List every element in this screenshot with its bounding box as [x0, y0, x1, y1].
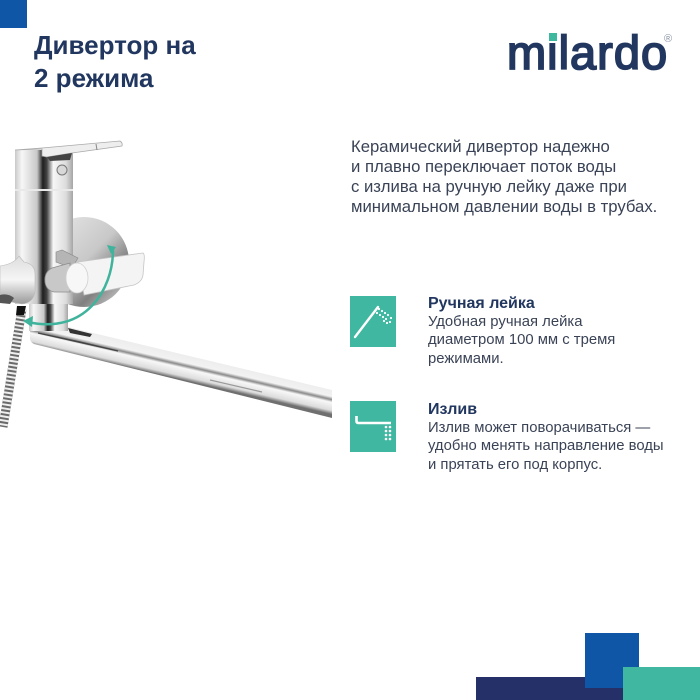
lever — [15, 141, 122, 175]
main body — [15, 150, 73, 304]
faucet illustration — [0, 140, 332, 428]
title — [34, 30, 196, 93]
text block: hand shower — [428, 295, 615, 367]
intro text: и плавно переключает поток воды — [351, 157, 616, 176]
description: hand shower: диаметром 100 мм с тремя — [428, 332, 615, 348]
corner square: top left — [0, 0, 27, 28]
description: spout: удобно менять направление воды — [428, 438, 664, 454]
side arm — [0, 256, 35, 304]
description: spout — [428, 420, 664, 473]
heading: hand shower: Ручная лейка — [428, 295, 535, 312]
diverter knob — [45, 250, 88, 293]
description: hand shower: Удобная ручная лейка — [428, 314, 582, 330]
text block: spout — [428, 401, 664, 473]
description: hand shower: режимами. — [428, 351, 504, 367]
icon: spout — [350, 401, 396, 452]
title: Дивертор на — [34, 30, 196, 60]
spout — [30, 327, 332, 418]
intro text: минимальном давлении воды в трубах. — [351, 197, 657, 216]
intro text: с излива на ручную лейку даже при — [351, 177, 627, 196]
logo: milardo: milardo — [507, 26, 668, 79]
logo: milardo: ® — [664, 33, 672, 45]
corner blocks: bottom right — [476, 633, 700, 700]
heading: spout: Излив — [428, 401, 477, 418]
icon: hand shower — [350, 296, 396, 347]
arrow: water flow switch — [23, 245, 116, 327]
wall plate — [39, 217, 129, 307]
title: 2 режима — [34, 63, 153, 93]
intro text: Керамический дивертор надежно — [351, 137, 610, 156]
description: spout: Излив может поворачиваться — — [428, 420, 650, 436]
description: spout: и прятать его под корпус. — [428, 457, 602, 473]
diverter box — [78, 253, 144, 295]
description: hand shower — [428, 314, 615, 367]
lower cylinder — [29, 303, 68, 331]
hose — [3, 309, 22, 427]
intro text — [351, 137, 657, 216]
